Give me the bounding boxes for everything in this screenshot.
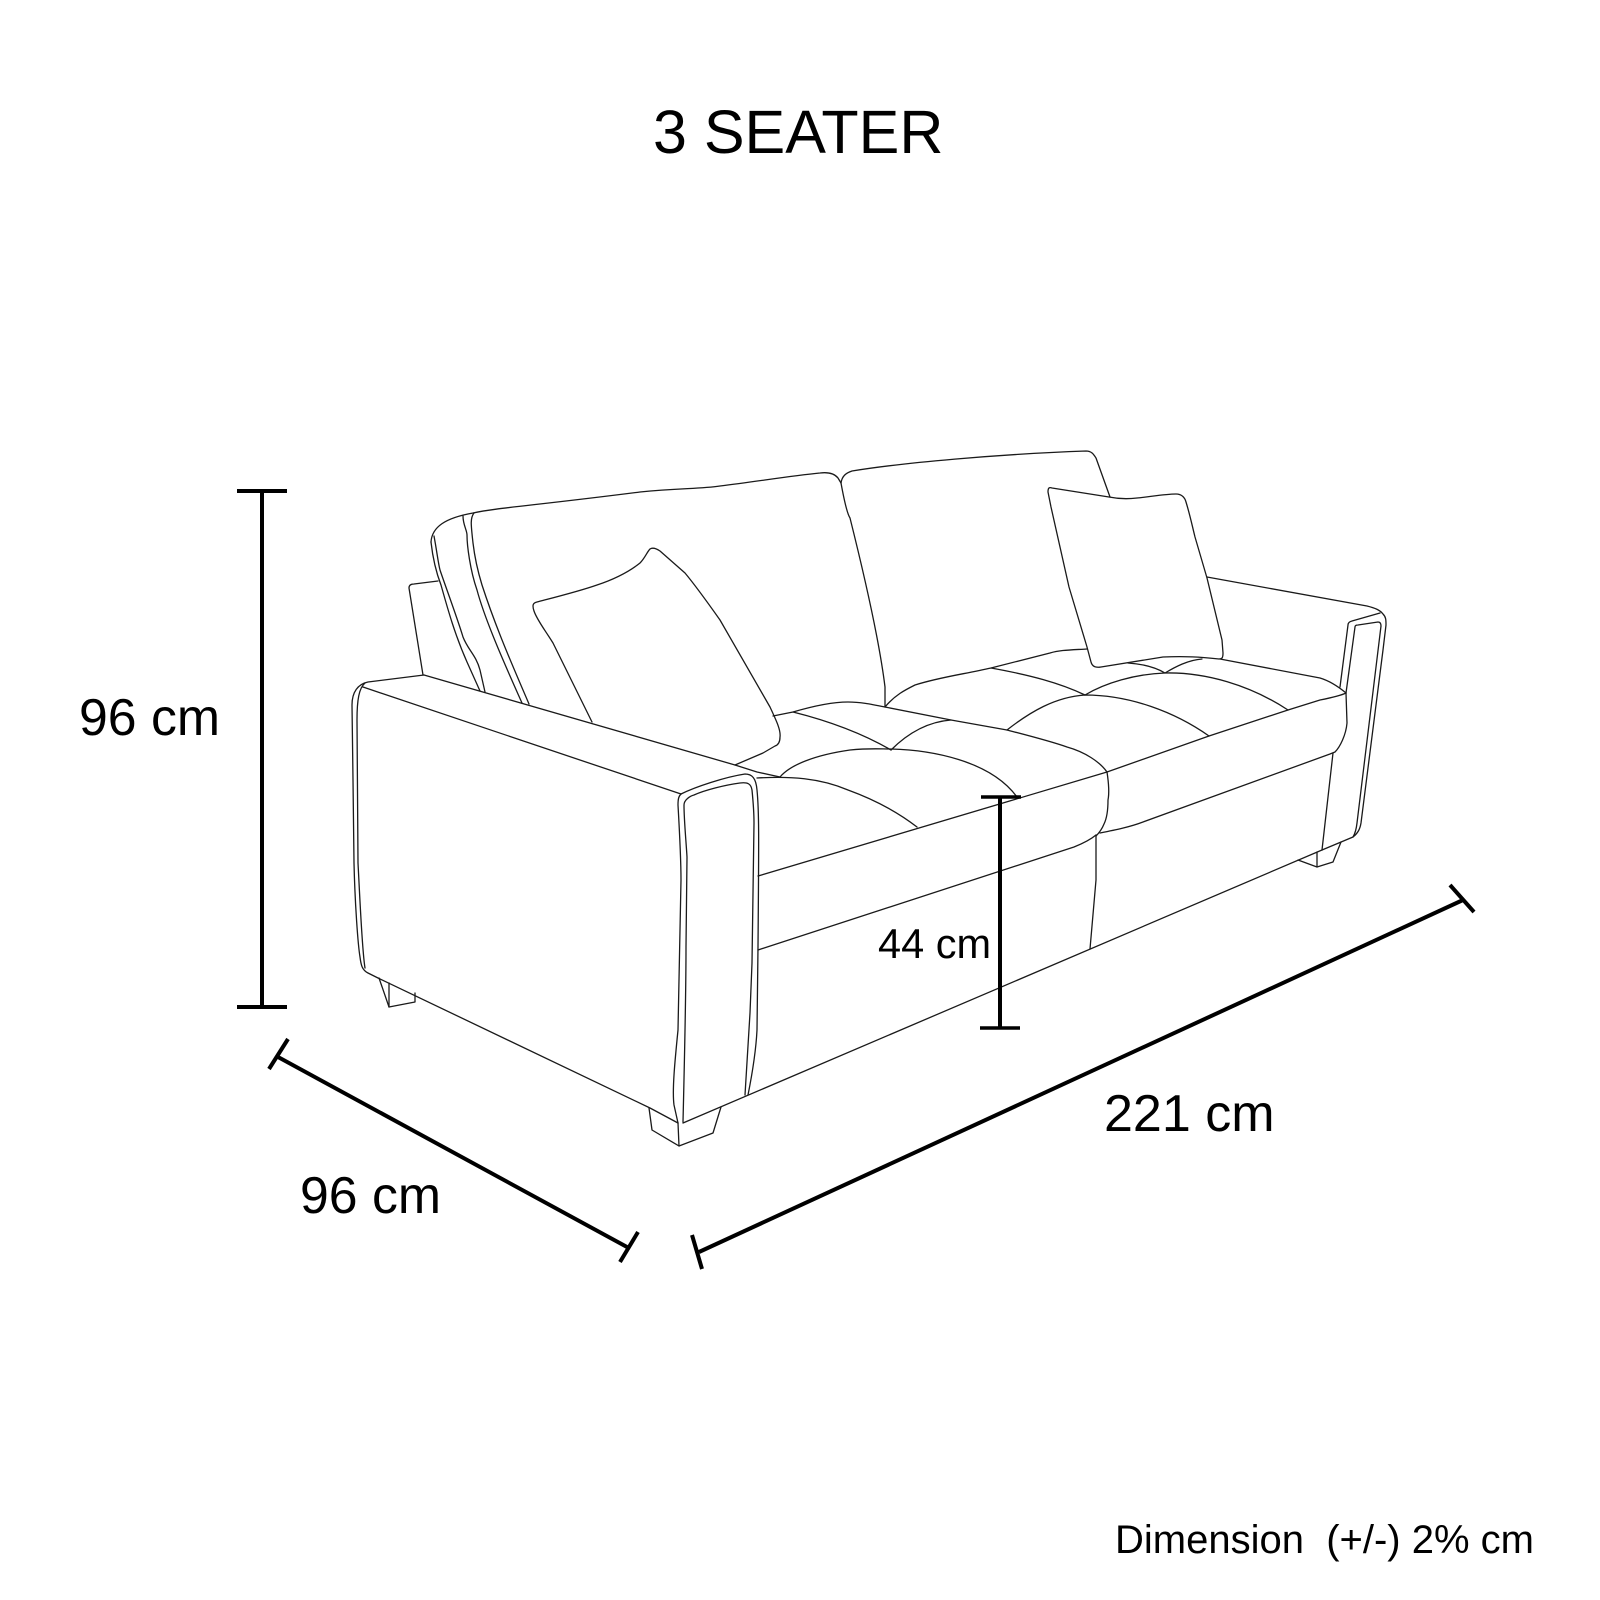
- right arm: [1207, 577, 1386, 850]
- right throw pillow: [1048, 488, 1223, 667]
- dimension: seat height 44 cm: 44 cm: [878, 920, 991, 967]
- back cushions: [409, 451, 1110, 707]
- sofa legs: [379, 842, 1341, 1146]
- left arm: [352, 675, 780, 1123]
- dimension: depth 96 cm: 96 cm: [300, 1166, 441, 1224]
- tolerance note: Dimension (+/-) 2% cm: [1115, 1518, 1534, 1562]
- left throw pillow: [533, 548, 780, 765]
- dimension: width 221 cm: 221 cm: [1104, 1085, 1275, 1143]
- sofa line drawing: [352, 451, 1386, 1146]
- seat cushions: [757, 649, 1346, 876]
- dimension: depth 96 cm: [269, 1039, 638, 1262]
- base front: [683, 693, 1347, 1123]
- dimension: width 221 cm: [692, 885, 1474, 1269]
- title: 3 SEATER: [653, 98, 943, 166]
- dimension: height 96 cm: 96 cm: [79, 688, 220, 746]
